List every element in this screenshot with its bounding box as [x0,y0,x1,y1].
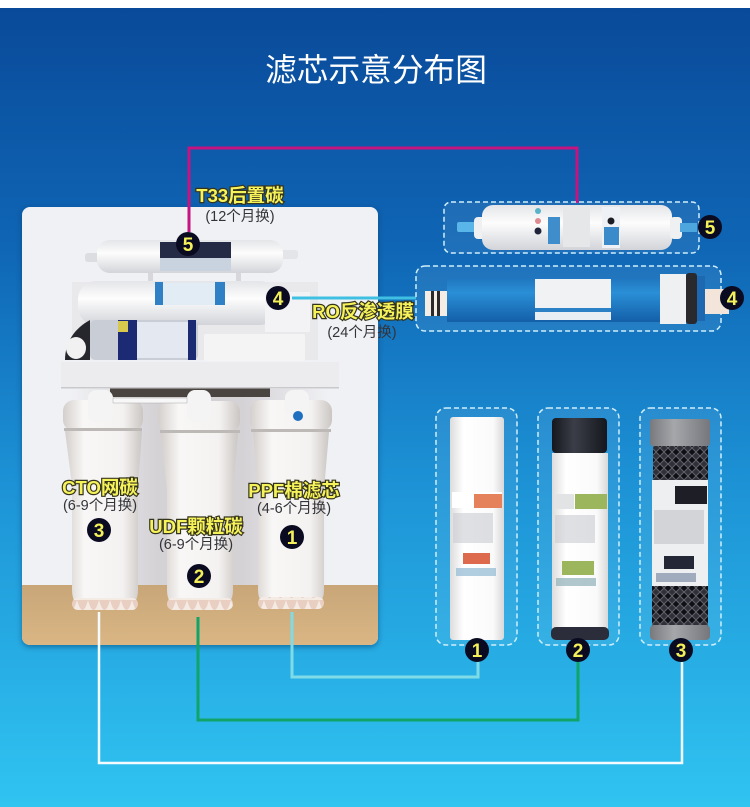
label: UDF: UDF颗粒碳 [149,516,243,537]
badge 2 right [566,638,590,662]
panel: filter 4 [416,266,729,331]
icon: canister 1 [250,390,332,609]
label: T33: (12个月换) [205,208,275,225]
badge 1 on unit [280,525,304,549]
label: CTO: (6-9个月换) [63,497,137,514]
label: CTO: CTO网碳 [62,477,138,498]
label: PPF: (4-6个月换) [257,500,331,517]
connector: green line for filter 2 [198,617,578,720]
badge 3 on unit: 3 [94,521,104,542]
badge 4 right [720,286,744,310]
badge 2 right: 2 [573,641,583,662]
label: PPF: PPF棉滤芯 [248,480,340,501]
icon: RO membrane housing on unit [72,281,318,360]
badge 1 right [465,638,489,662]
icon: canister 2 [158,390,240,610]
panel: filter 2 [538,408,619,645]
panel: filter 3 [640,408,721,645]
badge 3 right [669,638,693,662]
label: T33 [196,185,284,225]
connector: magenta line for filter 5 [189,148,577,232]
badge 5 on unit [176,232,200,256]
label: RO: (24个月换) [327,324,397,341]
panel: product photo [22,207,378,645]
icon: T33 filter on unit [85,240,298,281]
connector: light blue line for filter 1 [292,612,478,677]
badge 5 right: 5 [705,218,716,239]
connector: cyan line for filter 4 [292,296,416,300]
badge 4 on unit [266,286,290,310]
connector: white line for filter 3 [99,612,682,763]
badge 4 on unit: 4 [273,289,284,310]
title: 滤芯示意分布图 [265,52,487,88]
label: RO: RO反渗透膜 [312,301,414,322]
badge 3 right: 3 [676,641,686,662]
label: UDF [149,516,243,553]
badge 5 right [698,215,722,239]
panel: filter 5 [444,202,699,253]
icon: pump [65,320,198,360]
icon: electrical box [204,334,305,361]
label: UDF: (6-9个月换) [159,536,233,553]
shelf [61,362,339,397]
badge 1 on unit: 1 [287,528,298,549]
badge 2 on unit [187,564,211,588]
badge 4 right: 4 [727,289,738,310]
badge 5 on unit: 5 [183,235,194,256]
badge 1 right: 1 [472,641,483,662]
badge 3 on unit [87,518,111,542]
label: RO [312,301,414,341]
label: PPF [248,480,340,517]
icon: canister 3 [63,390,143,610]
panel: filter 1 [436,408,517,645]
badge 2 on unit: 2 [194,567,204,588]
label: T33: T33后置碳 [196,185,284,206]
pipe between canisters [113,398,187,403]
label: CTO [62,477,138,514]
